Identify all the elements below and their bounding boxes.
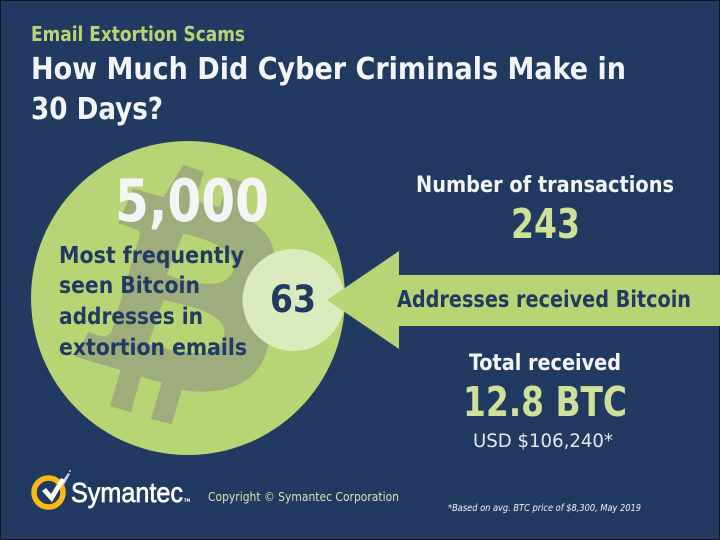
title	[31, 52, 626, 127]
footnote: *Based on avg. BTC price of $8,300, May 2019	[448, 503, 641, 514]
eyebrow heading: Email Extortion Scams	[31, 22, 245, 46]
icon: Symantec logo: TM	[184, 498, 190, 503]
icon: Symantec logo: Symantec	[71, 477, 183, 508]
title: How Much Did Cyber Criminals Make in	[31, 52, 626, 87]
inner circle with 63	[242, 249, 344, 351]
big number: 5,000	[115, 166, 269, 235]
arrow label: Addresses received Bitcoin	[397, 287, 691, 313]
green circle	[31, 141, 345, 455]
copyright: Copyright © Symantec Corporation	[208, 490, 399, 504]
icon: Symantec logo	[34, 470, 190, 508]
stat: total received: 12.8 BTC	[463, 378, 627, 426]
arrow	[327, 251, 720, 349]
circle description: extortion emails	[59, 335, 247, 361]
stat: total received: USD $106,240*	[473, 430, 613, 452]
panel: bitcoin circle	[31, 141, 345, 455]
stat: transactions: 243	[511, 200, 580, 248]
stat: total received	[463, 351, 627, 452]
circle description: Most frequently	[59, 243, 245, 269]
circle description: seen Bitcoin	[59, 273, 200, 299]
circle description: addresses in	[59, 304, 203, 330]
title: 30 Days?	[31, 92, 163, 127]
icon: bitcoin symbol	[75, 165, 274, 424]
inner circle with 63: 63	[270, 278, 316, 321]
stat: total received: Total received	[469, 351, 621, 376]
header	[31, 22, 626, 127]
stat: transactions: Number of transactions	[416, 173, 674, 198]
stat: transactions	[416, 173, 674, 248]
circle description	[59, 243, 247, 361]
